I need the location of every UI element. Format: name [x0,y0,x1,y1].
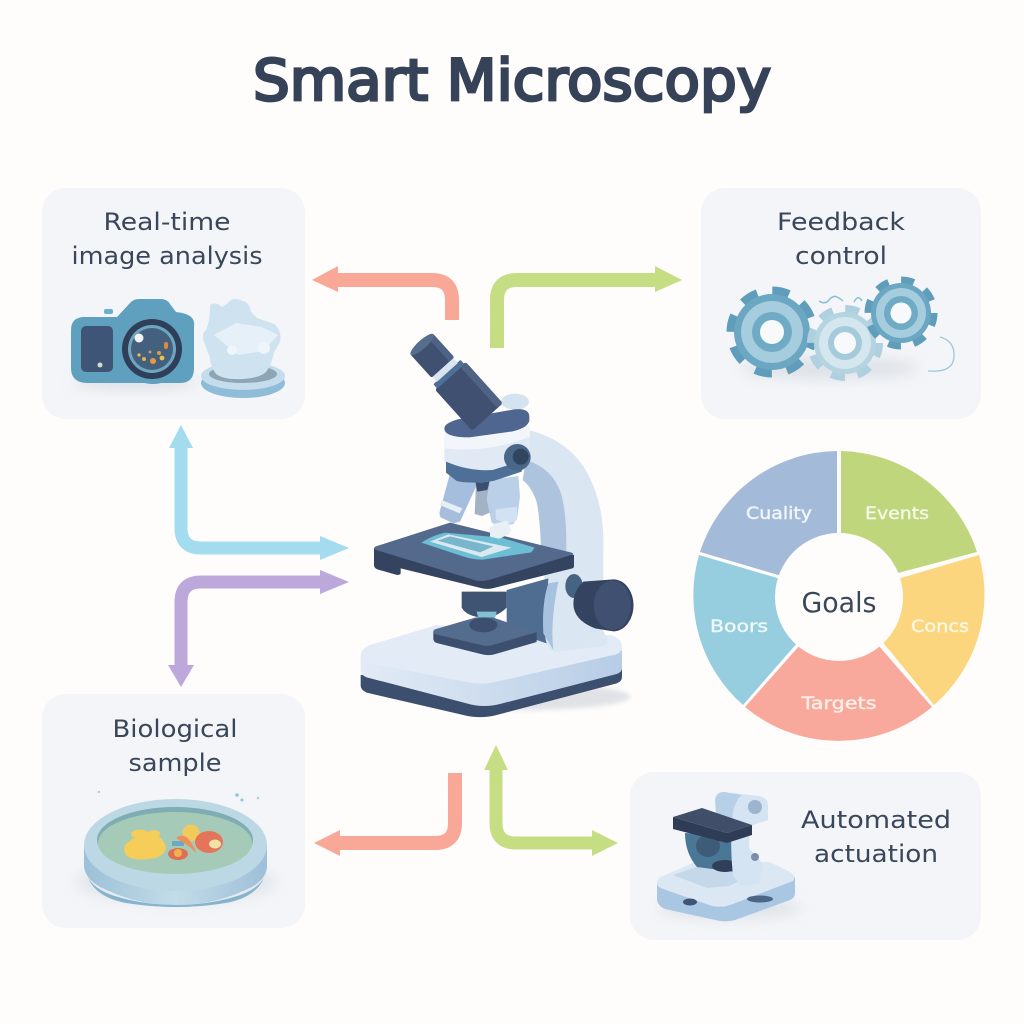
panel: biological sample [42,694,305,928]
label: real-time image analysis: image analysis [72,242,262,270]
panel: real-time image analysis [42,188,305,419]
panel: automated actuation [630,772,981,940]
large gear [731,291,813,373]
arrow: double-headed blue [169,425,349,560]
eyepiece tube [404,327,503,431]
segment: quality: Cuality [746,504,812,524]
title: Smart Microscopy [253,48,771,114]
middle gear [811,309,879,377]
label: feedback control: Feedback [777,208,905,236]
segment: events [841,451,977,578]
objectives [439,473,520,539]
icon: petri dish [76,791,276,907]
stage [374,523,574,589]
label: automated actuation: actuation [814,840,938,868]
segment: boors [693,555,798,705]
label: real-time image analysis: Real-time [104,208,230,236]
arm [500,430,607,652]
icon: gears [731,280,954,379]
label: biological sample: Biological [112,715,238,743]
label: automated actuation: Automated [801,806,951,834]
segment: targets [745,645,932,741]
label: feedback control: control [795,242,887,270]
arrow: analysis from microscope (red, top) [312,266,452,320]
focus knob [565,574,634,631]
segment: boors: Boors [710,617,768,637]
icon: 3D cell structure on slide [201,299,285,398]
segment: targets: Targets [800,694,877,714]
icon: camera [71,299,197,389]
central microscope [361,327,634,717]
arrow: microscope to feedback control (green, top) [497,266,682,348]
arrow: green, bottom double-headed [484,745,618,856]
donut chart: goals [693,451,984,741]
center label: Goals [802,586,876,619]
panel: feedback control [701,188,981,419]
donut hole [775,533,903,661]
arrow: double-headed purple [168,570,349,687]
segment: concs: Concs [911,617,969,637]
base [361,625,622,717]
segment: concs [881,555,984,705]
label: biological sample: sample [128,749,222,777]
arrow: red, bottom [314,773,455,856]
segment: quality [700,451,837,577]
segment: events: Events [865,504,929,524]
nosepiece body [444,394,531,483]
right gear [868,280,934,346]
stage lower parts [433,592,537,655]
icon: automated stage [657,792,802,921]
